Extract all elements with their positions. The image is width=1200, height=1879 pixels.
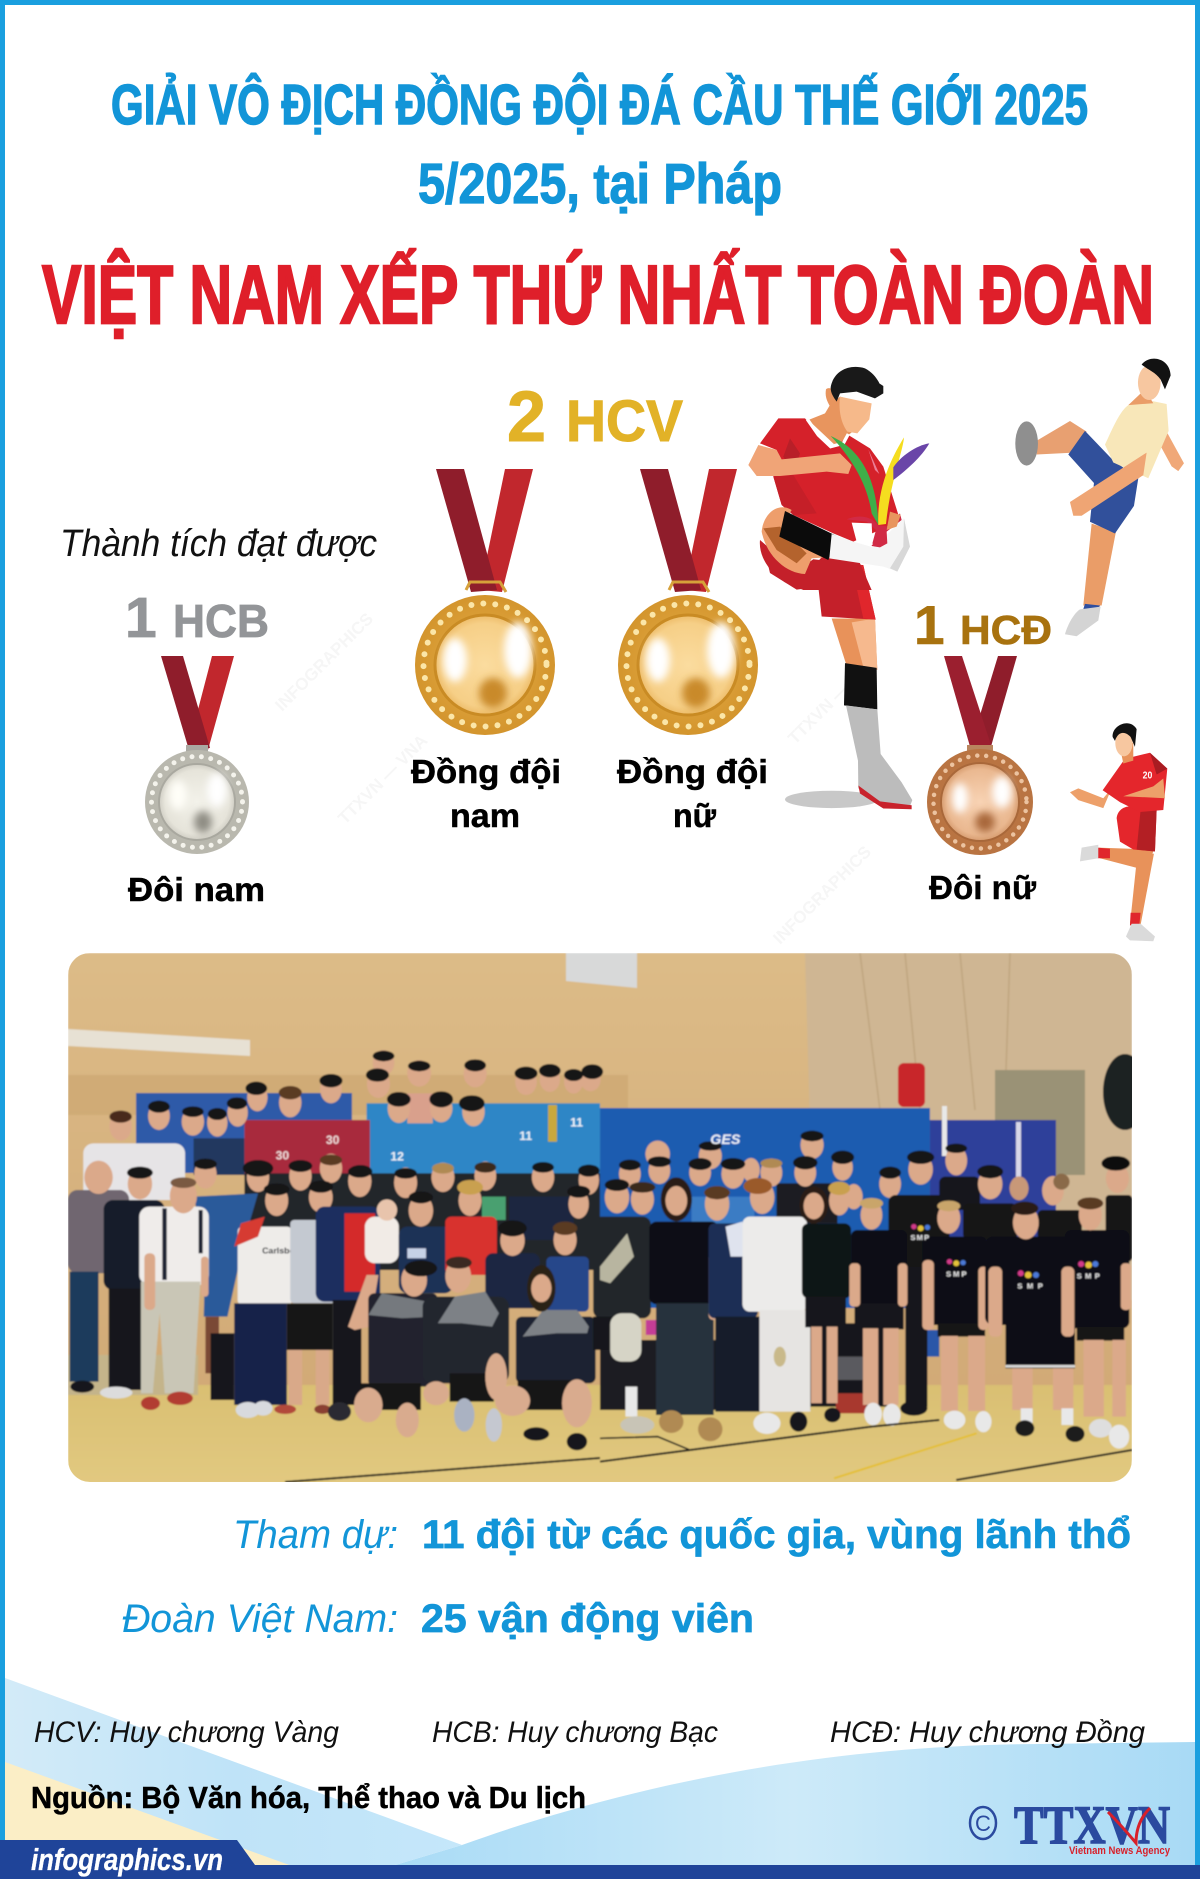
silver count: 1: [125, 586, 157, 650]
shirt logos: SMP: [1077, 1271, 1100, 1280]
dark-haired man: [485, 1220, 540, 1308]
logo: TTXVN: C: [975, 1811, 991, 1836]
man in grey tee: [274, 1181, 336, 1414]
woman with SMP shirt 1: [922, 1201, 992, 1432]
panel: bronze medal: [914, 594, 1052, 906]
label: men's team: [411, 753, 561, 834]
legend: medal abbreviations: HCB: Huy chương Bạc: [432, 1716, 718, 1749]
logo: TTXVN: Vietnam News Agency: [1069, 1845, 1171, 1857]
label: men's team: Đồng đội: [411, 753, 561, 790]
illustration: female player: 20: [1143, 770, 1152, 782]
panel: silver medal: [125, 586, 269, 908]
footer bar: [0, 1840, 1200, 1879]
illustration: female player: [1070, 723, 1167, 941]
legend: medal abbreviations: HCĐ: Huy chương Đồng: [830, 1716, 1145, 1749]
shuttlecock: [831, 436, 929, 547]
right half of crowd: [593, 1131, 1132, 1480]
photo: group of teams: [68, 953, 1147, 1485]
panel: gold medals: [411, 378, 768, 834]
value: athletes: 25 vận động viên: [421, 1597, 754, 1641]
silver count: HCB: [173, 595, 269, 647]
left half of crowd: 12: [390, 1150, 404, 1164]
label: Vietnam delegation: Đoàn Việt Nam:: [122, 1597, 398, 1641]
floor: [68, 1355, 1132, 1485]
kneeling player 1: [348, 1260, 438, 1437]
man in white: [743, 1178, 810, 1434]
watermarks: INFOGRAPHICS: [271, 609, 377, 715]
silver label: Đôi nam: [128, 871, 265, 908]
label: women's team: Đồng đội: [617, 753, 768, 790]
left half of crowd: 30: [326, 1133, 340, 1147]
bronze count: 1: [914, 594, 945, 656]
left half of crowd: [68, 1050, 603, 1450]
legend: medal abbreviations: [34, 1716, 1145, 1749]
man in blue jersey: [546, 1222, 589, 1312]
watermarks: INFOGRAPHICS: [769, 842, 875, 948]
woman in navy: [399, 1191, 453, 1293]
woman in black 2: [849, 1198, 907, 1426]
logo: TTXVN: TTXVN: [1014, 1795, 1170, 1855]
kneeling player 3: [495, 1265, 596, 1450]
label: women's team: [617, 753, 768, 834]
back black team: [888, 1144, 1132, 1416]
gold medal: men's team: [415, 469, 555, 735]
shirt logos: SMP: [946, 1270, 967, 1279]
logo: TTXVN: [970, 1795, 1171, 1857]
bronze count: HCĐ: [960, 607, 1052, 653]
wall and backdrop: [68, 953, 1132, 1386]
man with shoulder bag: [593, 1179, 657, 1434]
watermarks: [271, 609, 881, 948]
label: men's team: nam: [450, 797, 520, 834]
left floor line: [285, 1458, 600, 1482]
man with suspenders: [139, 1177, 209, 1410]
shirt logos: SMP: [1017, 1281, 1043, 1290]
woman in black 1: [800, 1186, 851, 1422]
man in navy jacket: [704, 1186, 763, 1412]
left half of crowd: 11: [570, 1116, 583, 1130]
label: participants: Tham dự:: [233, 1513, 398, 1557]
illustration: kicking man: [1015, 359, 1184, 636]
woman in SMP shirt, centre: [985, 1202, 1085, 1442]
watermarks: TTXVN — VNA: [334, 731, 431, 828]
background: bottom waves: [5, 1678, 1195, 1866]
shirt logos: [910, 1224, 1100, 1290]
gold count: HCV: [566, 389, 683, 454]
bronze medal disc: [927, 745, 1033, 855]
source: Nguồn: Bộ Văn hóa, Thể thao và Du lịch: [31, 1780, 586, 1815]
gold count: 2: [507, 378, 546, 457]
woman in red: [445, 1180, 497, 1275]
shirt logos: SMP: [910, 1233, 929, 1242]
website: infographics.vn: [31, 1842, 223, 1877]
gold medal: women's team: [618, 469, 758, 735]
value: teams: 11 đội từ các quốc gia, vùng lãnh thổ: [422, 1513, 1131, 1557]
man with glasses: [100, 1167, 165, 1399]
bronze label: Đôi nữ: [929, 869, 1036, 906]
woman in SMP shirt, right: [1065, 1197, 1131, 1449]
heading: achievements: Thành tích đạt được: [60, 523, 377, 565]
silver medal disc: [145, 745, 249, 854]
panel: participation facts: [122, 1513, 1131, 1641]
watermarks: TTXVN — VNA: [784, 651, 881, 748]
old man in grey: [68, 1161, 129, 1393]
man in black tee: [649, 1177, 722, 1441]
man holding baby: [316, 1166, 399, 1421]
left half of crowd: 11: [519, 1129, 532, 1143]
court lines: [600, 1420, 1132, 1480]
subtitle: date and place: 5/2025, tại Pháp: [418, 152, 782, 216]
illustration: main player with shuttlecock: [748, 367, 929, 809]
man in white jersey: Carlsberg: [262, 1245, 303, 1255]
left half of crowd: 30: [276, 1148, 289, 1162]
legend: medal abbreviations: HCV: Huy chương Vàng: [34, 1716, 339, 1749]
label: women's team: nữ: [673, 797, 716, 834]
silver ribbon: [161, 656, 234, 750]
bronze ribbon: [944, 656, 1017, 750]
kneeling player 2: [423, 1257, 509, 1442]
backdrop logo: GES: [710, 1131, 741, 1147]
man in white jersey: [232, 1184, 292, 1419]
